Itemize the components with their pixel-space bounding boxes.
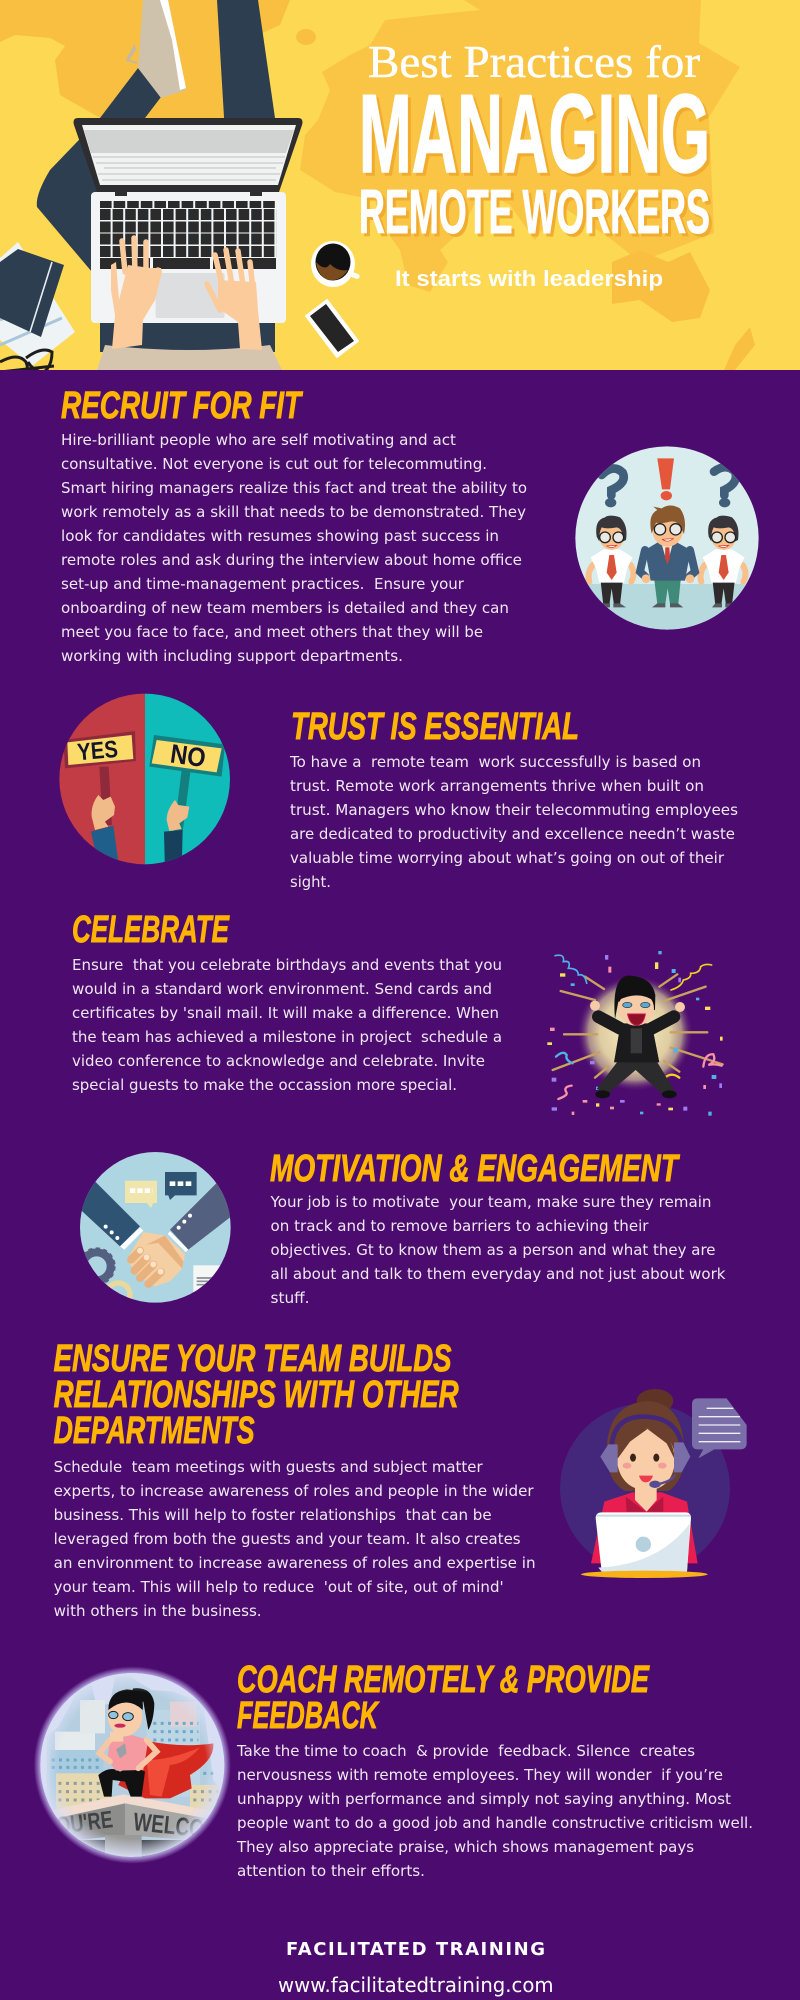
text block: the team has achieved a milestone in project schedule a (72, 1028, 502, 1046)
text block: set-up and time-management practices. Ensure your (61, 575, 465, 593)
text block: trust. Remote work arrangements thrive when built on (290, 777, 704, 795)
text block: stuff. (270, 1289, 310, 1307)
text block: are dedicated to productivity and excellence needn’t waste (290, 825, 735, 843)
text block: work remotely as a skill that needs to be demonstrated. They (61, 503, 526, 521)
text block: video conference to acknowledge and celebrate. Invite (72, 1052, 485, 1070)
icon: hands on keyboard (111, 238, 262, 350)
icon: handshake (80, 1152, 231, 1303)
keyboard (100, 204, 276, 264)
footer: website: www.facilitatedtraining.com (278, 1973, 554, 1997)
footer: company name: FACILITATED TRAINING (286, 1939, 545, 1960)
text block: certificates by 'snail mail. It will make a difference. When (72, 1004, 499, 1022)
text block: Smart hiring managers realize this fact and treat the ability to (61, 479, 527, 497)
text block: unhappy with performance and simply not saying anything. Most (237, 1790, 731, 1808)
subtitle: It starts with leadership (395, 266, 663, 291)
heading: DEPARTMENTS (54, 1410, 255, 1452)
icon: speech bubble (692, 1398, 747, 1458)
icon: superhero avatar on building: WELCOM (132, 1808, 221, 1845)
text block: remote roles and ask during the interview about home office (61, 551, 522, 569)
icon: three businessmen (575, 446, 759, 630)
text block: meet you face to face, and meet others that they will be (61, 623, 483, 641)
text block: your team. This will help to reduce 'out of site, out of mind' (54, 1578, 504, 1596)
text block: sight. (290, 873, 331, 891)
text block: business. This will help to foster relationships that can be (54, 1506, 492, 1524)
text block: Ensure that you celebrate birthdays and events that you (72, 956, 502, 974)
panel: ensure team builds relationships (54, 1338, 747, 1620)
center manager (640, 505, 695, 607)
icon: seated person legs and shoe (37, 0, 282, 370)
icon: celebrating avatar (547, 951, 723, 1116)
header banner (0, 0, 800, 372)
icon: coffee cup (311, 241, 360, 287)
text block: nervousness with remote employees. They will wonder if you’re (237, 1766, 723, 1784)
world map (0, 0, 755, 370)
text block (236, 1742, 753, 1880)
heading (54, 1338, 459, 1452)
text block: an environment to increase awareness of roles and expertise in (54, 1554, 536, 1572)
text block: They also appreciate praise, which shows management pays (236, 1838, 694, 1856)
text block: consultative. Not everyone is cut out for telecommuting. (61, 455, 487, 473)
text block: objectives. Gt to know them as a person and what they are (270, 1241, 716, 1259)
panel: celebrate (72, 909, 723, 1116)
text block: Your job is to motivate your team, make sure they remain (270, 1193, 712, 1211)
text block: Hire-brilliant people who are self motivating and act (61, 431, 456, 449)
heading: RELATIONSHIPS WITH OTHER (54, 1374, 459, 1416)
text block (289, 753, 738, 891)
heading (237, 1659, 650, 1737)
text block (54, 1458, 536, 1620)
icon: superhero avatar on building: OU'RE (55, 1806, 114, 1840)
text block: To have a remote team work successfully is based on (289, 753, 701, 771)
icon: support agent with laptop (560, 1389, 747, 1578)
heading: RECRUIT FOR FIT (61, 385, 303, 427)
text block (61, 431, 527, 665)
text block: onboarding of new team members is detailed and they can (61, 599, 509, 617)
text block: Take the time to coach & provide feedback. Silence creates (236, 1742, 695, 1760)
icon: glasses (0, 350, 54, 372)
text block: Schedule team meetings with guests and subject matter (54, 1458, 483, 1476)
text block: experts, to increase awareness of roles and people in the wider (54, 1482, 534, 1500)
icon: yes and no signs: NO (168, 739, 208, 773)
title: Best Practices for: Best Practices for (368, 36, 700, 87)
text block: leveraged from both the guests and your team. It also creates (54, 1530, 521, 1548)
text block: working with including support departments. (61, 647, 403, 665)
icon: superhero avatar on building (30, 1660, 235, 1865)
text block: special guests to make the occassion more special. (72, 1076, 457, 1094)
text block: on track and to remove barriers to achieving their (270, 1217, 649, 1235)
heading: ENSURE YOUR TEAM BUILDS (54, 1338, 452, 1380)
text block: would in a standard work environment. Send cards and (72, 980, 492, 998)
icon: yes and no signs: YES (76, 736, 119, 766)
text block: attention to their efforts. (237, 1862, 425, 1880)
text block (270, 1193, 726, 1307)
avatar figure (590, 976, 685, 1098)
panel: trust is essential (50, 685, 738, 891)
icon: notebook and paper (0, 242, 75, 366)
text block: all about and talk to them everyday and not just about work (270, 1265, 726, 1283)
icon: laptop (74, 118, 302, 323)
text block: look for candidates with resumes showing past success in (61, 527, 499, 545)
icon: yes and no signs (59, 694, 230, 864)
panel: coach remotely and provide feedback (30, 1659, 753, 1880)
icon: smartphone (306, 300, 358, 357)
heading: FEEDBACK (237, 1695, 380, 1737)
text block (72, 956, 502, 1094)
panel: recruit for fit (61, 385, 765, 665)
text block: valuable time worrying about what’s going on out of their (290, 849, 725, 867)
text block: people want to do a good job and handle constructive criticism well. (237, 1814, 753, 1832)
text block: with others in the business. (54, 1602, 262, 1620)
heading: TRUST IS ESSENTIAL (291, 706, 579, 748)
panel: motivation and engagement (75, 1148, 726, 1308)
heading: COACH REMOTELY & PROVIDE (237, 1659, 650, 1701)
heading: CELEBRATE (72, 909, 230, 951)
text block: trust. Managers who know their telecommuting employees (290, 801, 738, 819)
